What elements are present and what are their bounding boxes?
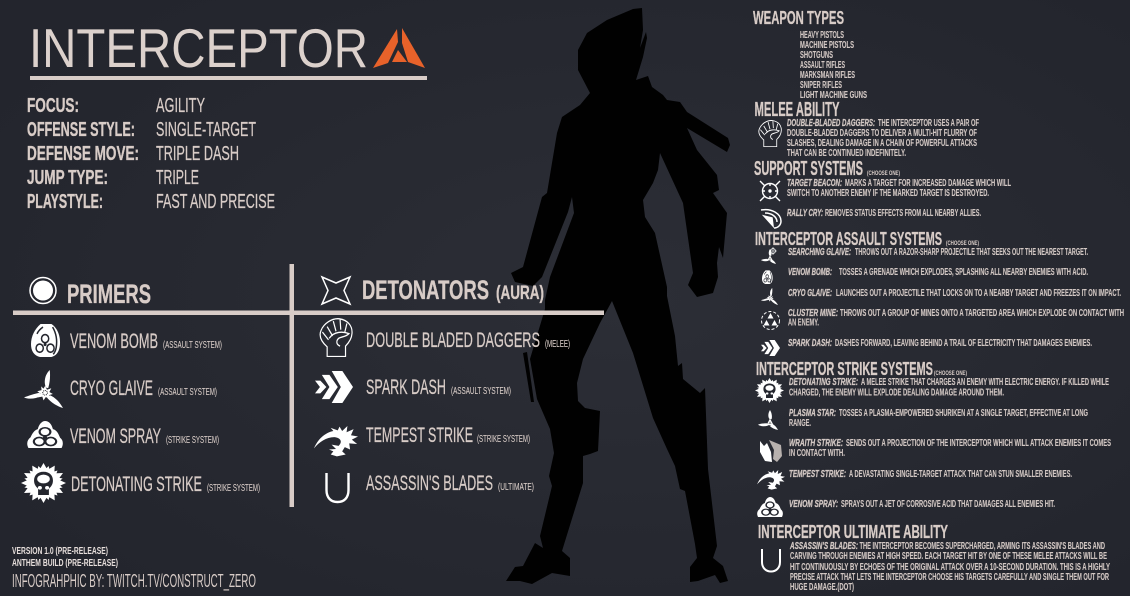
stat: defense move: TRIPLE DASH bbox=[156, 143, 239, 165]
spark dash description: SPARK DASH: bbox=[788, 338, 832, 349]
detonator: assassin's blades: (ULTIMATE) bbox=[498, 481, 534, 493]
tempest strike description: TEMPEST STRIKE: bbox=[789, 469, 846, 480]
primer: detonating strike bbox=[19, 461, 260, 505]
icon: wraith strike bbox=[760, 440, 782, 462]
icon: ultimate U bbox=[762, 549, 780, 572]
weapon list: LIGHT MACHINE GUNS bbox=[800, 90, 867, 101]
icon: searching glaive bbox=[761, 247, 777, 264]
melee description bbox=[787, 118, 979, 159]
stat: playstyle bbox=[27, 191, 275, 213]
icon: target beacon bbox=[760, 181, 780, 201]
stat: playstyle: PLAYSTYLE: bbox=[27, 191, 103, 213]
primer: venom bomb: (ASSAULT SYSTEM) bbox=[163, 339, 222, 351]
detonator: double bladed daggers bbox=[320, 319, 570, 357]
panel: strike systems bbox=[754, 358, 1111, 517]
panel: weapon types bbox=[753, 7, 867, 101]
heading: weapon types: WEAPON TYPES bbox=[753, 7, 844, 28]
heading: detonators: DETONATORS bbox=[362, 275, 489, 305]
panel: melee ability bbox=[754, 99, 979, 159]
stat: jump type bbox=[27, 167, 199, 189]
detonating strike description: DETONATING STRIKE: bbox=[789, 377, 858, 388]
heading: primers: PRIMERS bbox=[67, 279, 151, 309]
target beacon description: TARGET BEACON: bbox=[787, 178, 842, 189]
icon: spark dash bbox=[761, 340, 780, 356]
wraith strike description: WRAITH STRIKE: bbox=[789, 438, 843, 449]
primer: detonating strike: (STRIKE SYSTEM) bbox=[207, 482, 260, 494]
panel: primers bbox=[19, 278, 260, 505]
melee description: DOUBLE-BLADED DAGGERS TO DELIVER A MULTI-HIT FLURRY OF bbox=[787, 128, 977, 139]
weapon list: SNIPER RIFLES bbox=[800, 80, 842, 91]
heading: ultimate ability: INTERCEPTOR ULTIMATE ABILITY bbox=[758, 521, 948, 542]
icon: cryo glaive bbox=[761, 288, 778, 305]
stat: focus: AGILITY bbox=[156, 95, 205, 117]
rally cry description: REMOVES STATUS EFFECTS FROM ALL NEARBY ALLIES. bbox=[825, 208, 981, 219]
plasma star description bbox=[789, 408, 1088, 429]
icon: detonating strike bbox=[754, 377, 785, 404]
detonator: double bladed daggers: DOUBLE BLADED DAGGERS bbox=[366, 329, 540, 352]
ultimate description: HUGE DAMAGE.(DOT) bbox=[790, 582, 854, 593]
wraith strike description bbox=[789, 438, 1111, 459]
rally cry description bbox=[787, 208, 981, 219]
heading: strike systems: INTERCEPTOR STRIKE SYSTEMS bbox=[756, 358, 933, 379]
detonator: spark dash: (ASSAULT SYSTEM) bbox=[451, 385, 511, 397]
primer: venom spray: (STRIKE SYSTEM) bbox=[166, 434, 219, 446]
icon: rally cry bbox=[761, 210, 781, 228]
heading: detonators: (AURA) bbox=[496, 283, 544, 304]
target beacon description: MARKS A TARGET FOR INCREASED DAMAGE WHICH WILL bbox=[845, 178, 1011, 189]
stat: offense style: SINGLE-TARGET bbox=[156, 119, 256, 141]
wraith strike description: IN CONTACT WITH. bbox=[789, 448, 845, 459]
primer: venom bomb bbox=[31, 324, 222, 357]
melee description: THE INTERCEPTOR USES A PAIR OF bbox=[878, 118, 979, 129]
icon: cluster mine bbox=[762, 312, 780, 330]
panel: ultimate ability bbox=[758, 521, 1110, 593]
primer: cryo glaive bbox=[24, 370, 217, 408]
weapon list: HEAVY PISTOLS bbox=[800, 30, 844, 41]
detonator: spark dash bbox=[315, 371, 511, 403]
detonator: tempest strike bbox=[314, 424, 530, 456]
primer: detonating strike: DETONATING STRIKE bbox=[71, 473, 202, 496]
heading: melee ability: MELEE ABILITY bbox=[754, 99, 840, 121]
detonator: double bladed daggers: (MELEE) bbox=[545, 338, 570, 350]
target beacon description bbox=[787, 178, 1011, 199]
stat: playstyle: FAST AND PRECISE bbox=[156, 191, 275, 213]
primer: venom bomb: VENOM BOMB bbox=[70, 330, 158, 353]
venom spray description: VENOM SPRAY: bbox=[789, 499, 838, 510]
detonator: assassin's blades: ASSASSIN'S BLADES bbox=[366, 472, 493, 495]
detonator: assassin's blades bbox=[326, 472, 534, 502]
icon: detonator star bbox=[322, 277, 350, 304]
weapon list: SHOTGUNS bbox=[800, 50, 833, 61]
icon: venom spray bbox=[757, 497, 783, 517]
rally cry description: RALLY CRY: bbox=[787, 208, 823, 219]
stat: focus bbox=[27, 95, 205, 117]
icon: plasma star bbox=[758, 410, 778, 430]
title block bbox=[29, 17, 427, 80]
icon: primer circle bbox=[30, 278, 56, 304]
primer: venom spray: VENOM SPRAY bbox=[70, 425, 161, 448]
heading: support systems: SUPPORT SYSTEMS bbox=[754, 158, 863, 180]
icon: fist bbox=[759, 120, 781, 147]
icon: venom bomb bbox=[762, 270, 773, 284]
stat: offense style: OFFENSE STYLE: bbox=[27, 119, 135, 141]
heading: strike systems: (CHOOSE ONE) bbox=[934, 370, 967, 377]
heading: assault systems: (CHOOSE ONE) bbox=[946, 240, 979, 247]
detonator: spark dash: SPARK DASH bbox=[366, 376, 446, 399]
character silhouette bbox=[506, 8, 730, 584]
primer: cryo glaive: (ASSAULT SYSTEM) bbox=[158, 386, 217, 398]
combo divider cross bbox=[13, 264, 604, 507]
heading: support systems: (CHOOSE ONE) bbox=[867, 170, 900, 177]
tempest strike description bbox=[789, 469, 1072, 480]
panel: support systems bbox=[754, 158, 1011, 228]
weapon list: MARKSMAN RIFLES bbox=[800, 70, 855, 81]
ultimate description bbox=[789, 541, 1110, 593]
venom bomb description: VENOM BOMB: bbox=[788, 267, 832, 278]
stat: focus: FOCUS: bbox=[27, 95, 79, 117]
melee description: THAT CAN BE CONTINUED INDEFINITELY. bbox=[787, 148, 906, 159]
plasma star description: PLASMA STAR: bbox=[789, 408, 836, 419]
primer: cryo glaive: CRYO GLAIVE bbox=[70, 377, 153, 400]
title: INTERCEPTOR bbox=[29, 17, 368, 79]
detonating strike description bbox=[789, 377, 1109, 398]
title underline bbox=[30, 76, 427, 80]
panel: detonators bbox=[314, 275, 570, 502]
heading: assault systems: INTERCEPTOR ASSAULT SYSTEMS bbox=[755, 228, 942, 249]
weapon list: ASSAULT RIFLES bbox=[800, 60, 845, 71]
weapon list bbox=[800, 30, 867, 101]
cryo glaive description: CRYO GLAIVE: bbox=[788, 288, 832, 299]
detonator: tempest strike: TEMPEST STRIKE bbox=[366, 424, 473, 447]
stat: jump type: TRIPLE bbox=[156, 167, 199, 189]
searching glaive description bbox=[788, 247, 1088, 258]
detonator: tempest strike: (STRIKE SYSTEM) bbox=[477, 433, 530, 445]
credit text: INFOGRAHPHIC BY: TWITCH.TV/CONSTRUCT_ZERO bbox=[12, 570, 256, 592]
primer: venom spray bbox=[27, 421, 219, 448]
build text: ANTHEM BUILD (PRE-RELEASE) bbox=[12, 558, 118, 569]
icon: tempest strike bbox=[757, 470, 785, 490]
cluster mine description: CLUSTER MINE: bbox=[788, 308, 838, 319]
cluster mine description: AN ENEMY. bbox=[788, 318, 819, 328]
plasma star description: RANGE. bbox=[789, 418, 811, 429]
version text: VERSION 1.0 (PRE-RELEASE) bbox=[12, 546, 108, 557]
icon: orange class logo bbox=[373, 28, 425, 68]
version credits bbox=[12, 546, 256, 592]
melee description: DOUBLE-BLADED DAGGERS: bbox=[787, 118, 875, 129]
melee description: SLASHES, DEALING DAMAGE IN A CHAIN OF POWERFUL ATTACKS bbox=[787, 138, 977, 149]
cluster mine description bbox=[788, 308, 1124, 328]
stat: jump type: JUMP TYPE: bbox=[27, 167, 108, 189]
venom spray description bbox=[789, 499, 1055, 510]
stat: defense move: DEFENSE MOVE: bbox=[27, 143, 139, 165]
class stats bbox=[27, 95, 275, 213]
panel: assault systems bbox=[755, 228, 1124, 356]
searching glaive description: SEARCHING GLAIVE: bbox=[788, 247, 851, 258]
weapon list: MACHINE PISTOLS bbox=[800, 40, 854, 51]
ultimate description: ASSASSIN'S BLADES: bbox=[789, 541, 858, 552]
